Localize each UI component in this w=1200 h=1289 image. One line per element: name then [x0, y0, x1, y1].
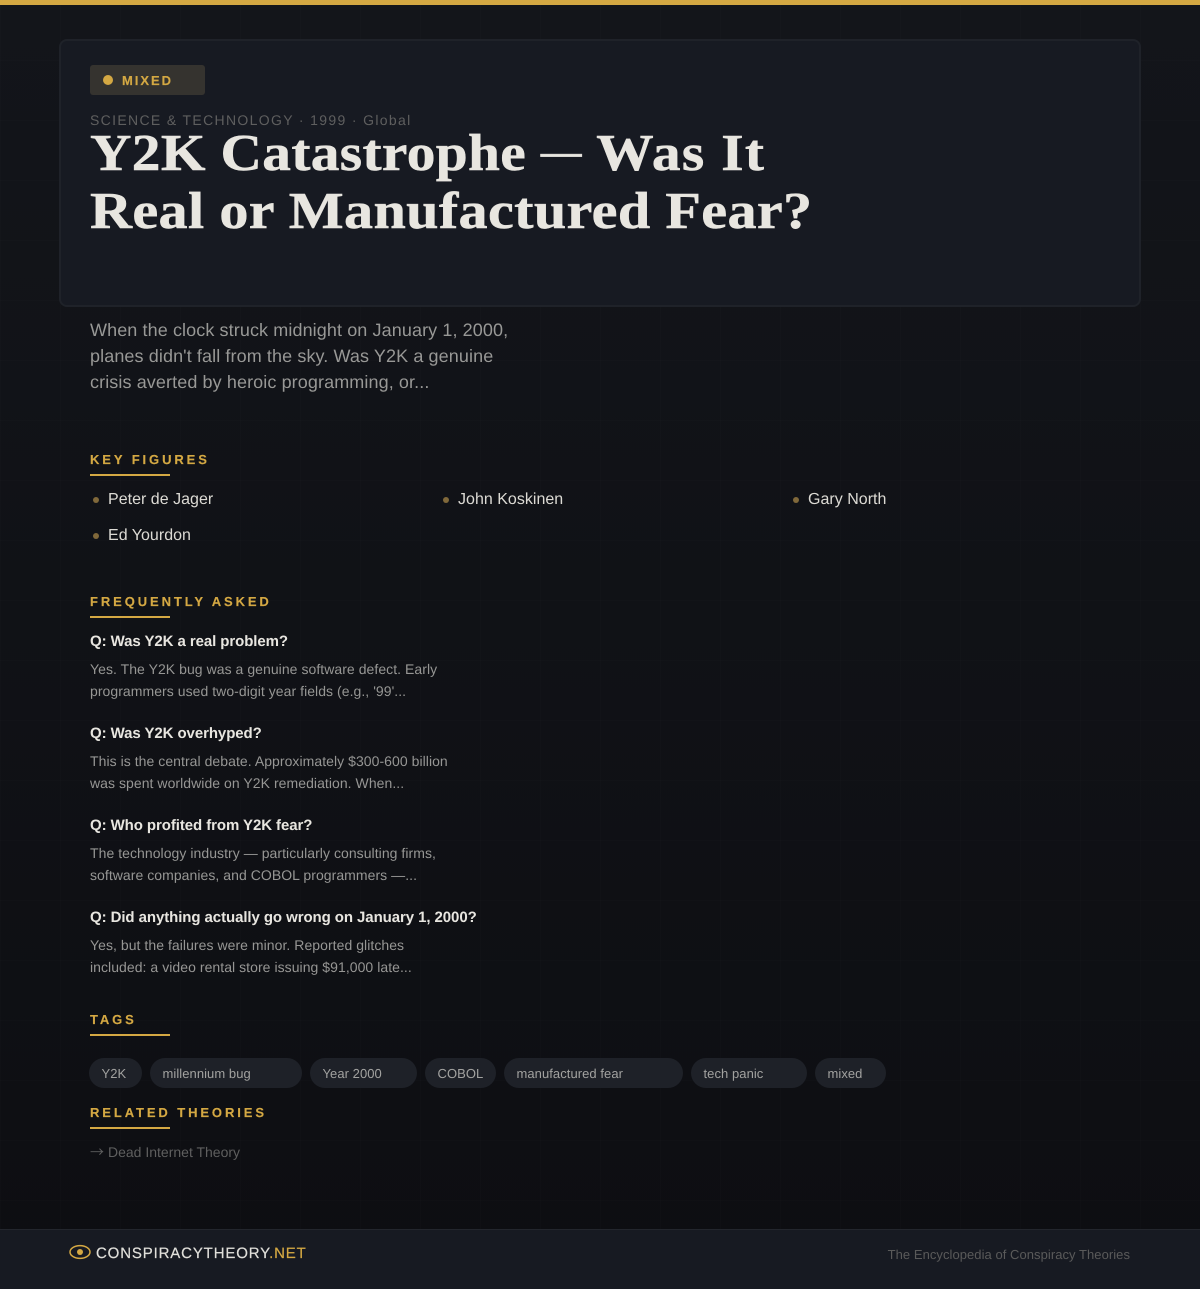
list: key figures — [93, 491, 886, 544]
footer tagline: The Encyclopedia of Conspiracy Theories — [888, 1247, 1130, 1262]
answer 4 — [90, 937, 412, 975]
answer 1 — [90, 661, 437, 699]
figure: John Koskinen: John Koskinen — [458, 491, 563, 508]
category meta line: SCIENCE & TECHNOLOGY · 1999 · Global — [90, 112, 412, 128]
question 1: Q: Was Y2K a real problem? — [90, 633, 288, 650]
top accent bar — [0, 0, 1200, 5]
intro paragraph — [90, 320, 508, 392]
heading: frequently asked: FREQUENTLY ASKED — [90, 594, 272, 609]
title — [90, 125, 812, 240]
tag: mixed: mixed — [828, 1066, 862, 1081]
figure: Peter de Jager: Peter de Jager — [108, 491, 213, 508]
heading: tags: TAGS — [90, 1012, 137, 1027]
logo wordmark: CONSPIRACYTHEORY.NET — [96, 1245, 307, 1262]
tag: Y2K — [89, 1058, 142, 1088]
panel: header — [59, 39, 1141, 307]
badge label: MIXED — [122, 72, 173, 88]
heading: related theories: RELATED THEORIES — [90, 1105, 267, 1120]
answer 1: programmers used two-digit year fields (e.g., '99'... — [90, 683, 406, 699]
icon: eye logo — [69, 1244, 91, 1260]
intro paragraph: When the clock struck midnight on January 1, 2000, — [90, 320, 508, 340]
answer 4: included: a video rental store issuing $91,000 late... — [90, 959, 412, 975]
footer — [0, 1229, 1200, 1289]
title line 2: Real or Manufactured Fear? — [90, 183, 812, 240]
answer 3: The technology industry — particularly consulting firms, — [90, 845, 436, 861]
tag: manufactured fear: manufactured fear — [516, 1066, 623, 1081]
answer 4: Yes, but the failures were minor. Reported glitches — [90, 937, 404, 953]
tag: tech panic — [691, 1058, 807, 1088]
tag: COBOL: COBOL — [438, 1066, 483, 1081]
answer 2: was spent worldwide on Y2K remediation. When... — [90, 775, 404, 791]
verdict badge: mixed — [90, 65, 205, 95]
figure: Gary North: Gary North — [808, 491, 886, 508]
question 4: Q: Did anything actually go wrong on January 1, 2000? — [90, 909, 477, 926]
figure: Ed Yourdon: Ed Yourdon — [108, 527, 191, 544]
answer 2 — [90, 753, 448, 791]
tag: COBOL — [425, 1058, 496, 1088]
tag: Year 2000 — [310, 1058, 417, 1088]
question 2: Q: Was Y2K overhyped? — [90, 725, 262, 742]
question 3: Q: Who profited from Y2K fear? — [90, 817, 312, 834]
heading: key figures: KEY FIGURES — [90, 452, 210, 467]
answer 3: software companies, and COBOL programmers —... — [90, 867, 417, 883]
tag: mixed — [815, 1058, 886, 1088]
answer 2: This is the central debate. Approximately $300-600 billion — [90, 753, 448, 769]
title line 1: Y2K Catastrophe — Was It — [90, 125, 765, 182]
tag: manufactured fear — [504, 1058, 683, 1088]
tag: Year 2000: Year 2000 — [322, 1066, 382, 1081]
intro paragraph: planes didn't fall from the sky. Was Y2K a genuine — [90, 346, 493, 366]
tag: millennium bug — [150, 1058, 302, 1088]
answer 3 — [90, 845, 436, 883]
tag: tech panic: tech panic — [704, 1066, 763, 1081]
intro paragraph: crisis averted by heroic programming, or... — [90, 372, 429, 392]
tag: Y2K: Y2K — [102, 1066, 126, 1081]
badge dot — [103, 75, 113, 85]
related theory link: → Dead Internet Theory — [90, 1142, 240, 1162]
tag: millennium bug: millennium bug — [162, 1066, 251, 1081]
answer 1: Yes. The Y2K bug was a genuine software defect. Early — [90, 661, 437, 677]
